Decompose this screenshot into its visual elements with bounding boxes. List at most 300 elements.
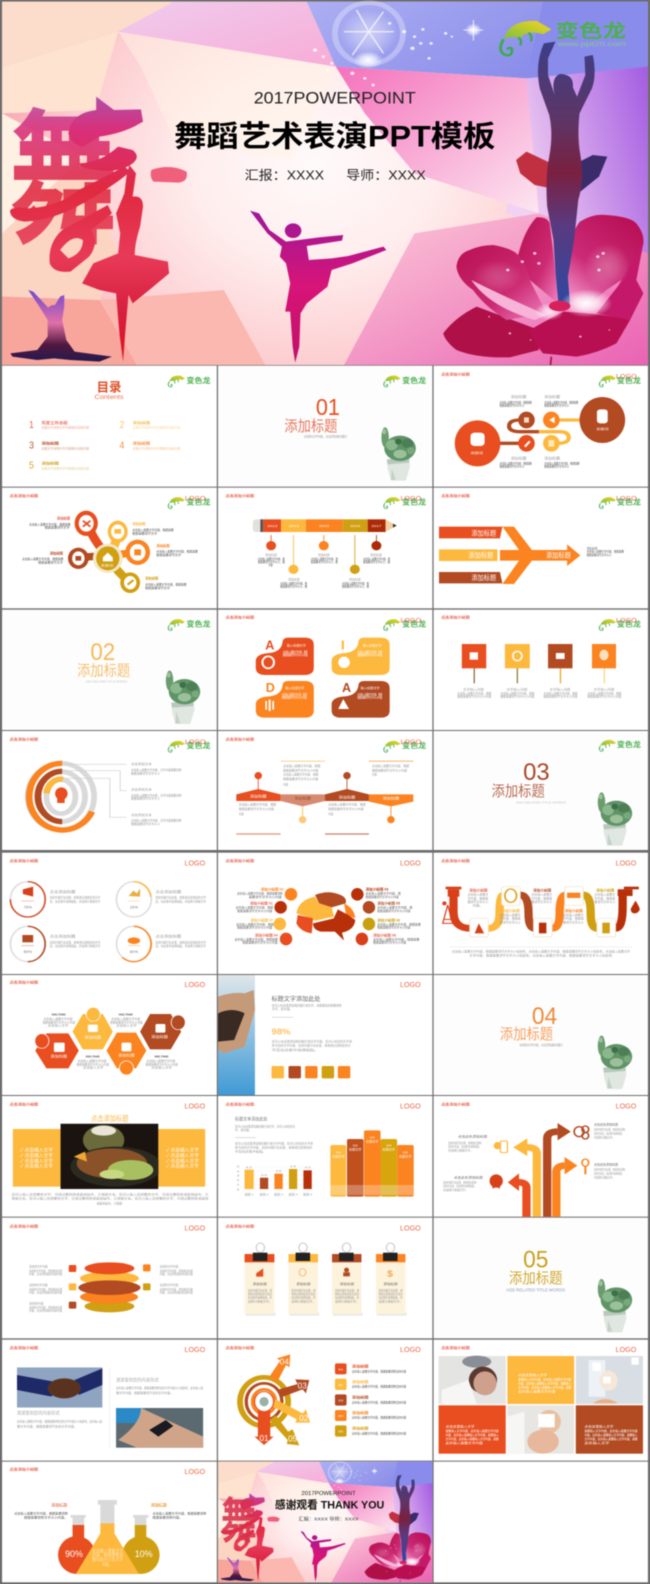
- slide label: 点击添加小标题: [441, 614, 471, 620]
- card red: 点击输入需要文字内容，根据: [283, 649, 308, 654]
- text column: 字，和内容。: [235, 1127, 252, 1132]
- disc text blocks: [29, 1264, 193, 1313]
- contents list: 此图文字说明文字内容相关总结内容: [41, 425, 90, 430]
- arrow text blocks: 并选择只保留文字。: [594, 1135, 615, 1140]
- hexagon cluster: [35, 1014, 181, 1068]
- section caption: ADD RELATED TITLE WORDS: [86, 680, 128, 683]
- small bar chart: 2: [237, 1178, 239, 1182]
- brand logo: www.ppt20.com: [556, 40, 626, 48]
- pipeline text: 添加小标题: [469, 887, 488, 893]
- caption text: 您可以输入您想要的文字，可通过要转换或其他操作，只保留文本。您可以输入您想要的文字，可通过要转换或其他操作，只: [12, 1192, 209, 1196]
- contents heading: 目录: [97, 380, 121, 395]
- pipe caps and drop: [442, 887, 640, 923]
- arrow text blocks: 您的内容打在这里，或者通过复制: [594, 1127, 626, 1132]
- section caption: ADD RELATED TITLE WORDS: [506, 1288, 565, 1293]
- brown card: 点击这里输入文字: [585, 1424, 614, 1428]
- flask labels: 添加标题: [51, 1502, 68, 1508]
- row group 6 and 7: [2, 853, 648, 1095]
- brain text blocks: 此处输入需要文字内容，根据: [236, 905, 274, 910]
- radial arrow 03: 03: [298, 1382, 307, 1390]
- logo text: LOGO: [400, 859, 421, 867]
- tall rounded bars: 01: [336, 1151, 341, 1154]
- section caption: 请替换文字内容，点击添加相关图片: [304, 434, 348, 438]
- logo: [384, 376, 427, 387]
- pipeline text: 字内容，根据需: [500, 916, 521, 921]
- slide label: 点击添加小标题: [10, 1101, 39, 1107]
- main arrow: [500, 527, 580, 584]
- squares and stems: [462, 644, 616, 683]
- hexagon text blocks: 根据需要调节文字大小内容: [77, 1062, 110, 1066]
- pipeline text: 添加小标题: [533, 887, 552, 893]
- ring text blocks: [131, 761, 182, 826]
- timeline text: 点击输入需要文字内容，根: [258, 556, 285, 561]
- keyword text blocks: 根据需要调节文字大小: [544, 464, 570, 469]
- logo text: LOGO: [184, 859, 206, 867]
- brain text blocks: 添加小标题 02: [261, 886, 284, 892]
- tall rounded bars: [330, 1130, 414, 1197]
- right bullets: ✓ 点击输入文字: [166, 1163, 199, 1169]
- section caption: 请替换文字内容，点击添加相关图片: [519, 1042, 563, 1047]
- logo: [384, 616, 427, 631]
- logo: [168, 376, 211, 387]
- flask values: [65, 1548, 153, 1568]
- brain text blocks: 根据需要调节文字大小内容: [237, 925, 273, 930]
- slide label: 点击添加小标题: [441, 371, 471, 376]
- right bullets: [166, 1147, 199, 1169]
- gauge text blocks: 后，在此框中选择粘贴，并选择只保留文字: [50, 943, 101, 948]
- logo: [599, 740, 642, 751]
- gauge text blocks: 您的内容打在这里，或者通过复制您的文字: [50, 895, 101, 900]
- text block right: 渡渡复制您的内容形式: [116, 1377, 159, 1383]
- card red: [256, 638, 314, 675]
- disc text blocks: 内容，点击添加相关标题内容: [29, 1308, 63, 1313]
- sparkle ring: [313, 3, 483, 86]
- node text blocks: 点击输入需要文字内容，根据需要: [156, 549, 198, 554]
- small bar chart: 类别 3: [274, 1192, 283, 1197]
- ribbon text blocks: 内容: [328, 811, 334, 816]
- logo: 变色龙: [402, 741, 427, 750]
- number 04: 04: [532, 1002, 557, 1029]
- list items: 添加标题: [352, 1410, 369, 1415]
- small bar chart: 4.2: [305, 1166, 311, 1170]
- body text: 字后在此框中选择粘贴。: [272, 1047, 318, 1052]
- square captions: 根据需要调节文字大小内容: [457, 694, 492, 698]
- row group 8 and 9: [2, 1096, 648, 1338]
- brain text blocks: 添加小标题 05: [377, 900, 401, 906]
- radial arrow 05: 05: [288, 1435, 297, 1443]
- flower: [443, 215, 644, 365]
- ribbon text blocks: 点击输入需要文字内容，根据: [283, 763, 321, 768]
- hero background: [2, 2, 648, 365]
- left bars: 添加标题: [468, 550, 494, 559]
- pipeline text: 要调节文字大小: [468, 899, 489, 904]
- square captions: 根据需要调节文字大小内容: [500, 694, 535, 698]
- disc text blocks: 请替换文字内容: [29, 1282, 48, 1287]
- arrow text blocks: 点击此处添加标题: [454, 1175, 484, 1179]
- radial arrow 04: 04: [280, 1357, 289, 1366]
- flask labels: [14, 1502, 207, 1520]
- disc text blocks: 内容，点击添加相关标题内容: [160, 1290, 193, 1294]
- timeline nodes: [266, 541, 381, 574]
- ring text blocks: 点击输入需要文字内容，文字内容需要调整: [131, 793, 182, 797]
- card brown: 输入标题文字: [361, 685, 380, 690]
- ring text blocks: 点击输入需要文字内容，文字内容需要调整: [131, 818, 182, 823]
- slide: photo with 98 percent: [218, 975, 432, 1095]
- row group 10 and 11: [2, 1340, 648, 1582]
- card brown: A: [342, 681, 351, 696]
- section title: 添加标题: [284, 418, 337, 435]
- numbered markers: [255, 772, 395, 823]
- center icon: [255, 1392, 274, 1412]
- brain text blocks: 此处输入需要文字内容，根据需要调整: [237, 891, 283, 896]
- brain text blocks: 根据需要调节文字大小内容: [243, 940, 278, 945]
- tall rounded bars: 标题文字: [383, 1147, 396, 1152]
- slide: radial arrows: [218, 1340, 432, 1461]
- slide label: 点击添加小标题: [10, 1223, 39, 1228]
- keyword text blocks: 点击输入需要文字内容，根据需要: [544, 461, 580, 465]
- text block right: 要文字内容，根据需要调节您的文字内容。: [116, 1390, 173, 1395]
- card brown: [332, 681, 390, 718]
- photo: food plate: [61, 1124, 162, 1189]
- photo: baby checkup: [507, 1405, 574, 1454]
- slide: percent circles: [2, 853, 217, 974]
- calligraphy brush accents: [10, 97, 187, 272]
- slide: hexagons: [2, 975, 217, 1095]
- square captions: 点击输入需要文字内容，根据: [587, 691, 622, 695]
- arrow text blocks: 您的文本后，在此框中选择粘贴，: [594, 1131, 624, 1136]
- slide label: 点击添加小标题: [226, 1345, 255, 1350]
- text block left: 要文字内容，根据需要调节您的文字内容。: [17, 1424, 77, 1428]
- pencil bar: 2013: [267, 524, 277, 528]
- node text blocks: 点击输入需要文字内容，根据需要: [145, 582, 187, 587]
- icon boxes: [470, 887, 616, 937]
- hexagon text blocks: 根据需要调节文字大小内容: [110, 1020, 143, 1024]
- left bullets: [20, 1147, 53, 1169]
- disc text blocks: 请替换文字内容: [29, 1264, 48, 1269]
- pipeline text: 点击输入需要文: [531, 892, 553, 897]
- note four: 选择只保留文字。: [378, 1299, 403, 1303]
- logo: LOGO: [616, 372, 637, 380]
- node text blocks: 根据需要调节文字: [145, 585, 171, 590]
- timeline text: 点击输入需要文字内容，根: [363, 556, 390, 561]
- logo: [384, 738, 427, 752]
- logo: 变色龙: [617, 619, 642, 628]
- hexagon text blocks: 点击输入文字: [48, 1023, 69, 1028]
- small bar chart: 0: [237, 1188, 239, 1191]
- side icon circles: [274, 888, 375, 945]
- tall rounded bars: 标题文字: [332, 1154, 345, 1158]
- closing artwork: [218, 1462, 432, 1582]
- disc text blocks: 内容，点击添加相关标题内容: [29, 1290, 63, 1294]
- arrow text blocks: [443, 1122, 626, 1192]
- brain text blocks: 根据需要调节文字大小内容: [377, 925, 411, 930]
- circle nodes: 关键词: [101, 563, 114, 568]
- closing title: 感谢观看 THANK YOU: [275, 1498, 384, 1511]
- slide: pipeline: [434, 853, 648, 974]
- accent rules: [236, 761, 413, 835]
- flask right: [122, 1515, 160, 1574]
- node text blocks: 添加标题: [132, 521, 146, 526]
- brain text blocks: 添加小标题 06: [377, 917, 401, 922]
- connector arms: [79, 523, 138, 582]
- hexagon text blocks: 468,769K: [154, 1055, 169, 1059]
- card yellow: [332, 638, 390, 675]
- card brown: 点击输入需要文字内容，根据: [357, 692, 383, 697]
- pipeline text: 点击输入需要文: [563, 912, 584, 917]
- left bullets: ✓ 点击输入文字: [20, 1163, 53, 1169]
- row group 2 and 3: [2, 366, 648, 608]
- gauge text blocks: 后，在此框中选择粘贴，并选择只保留文字: [155, 899, 207, 903]
- ring text blocks: 点击输入需要文字内容，文字内容需要调整: [131, 767, 182, 772]
- gauge text blocks: 点击添加标题: [155, 933, 181, 939]
- circle nodes: [68, 511, 150, 593]
- contents list: 1: [29, 420, 34, 431]
- brain text blocks: 根据需要调节文字大小内容: [373, 940, 407, 945]
- contents list: 添加标题: [133, 420, 151, 425]
- flower glow: [473, 243, 630, 341]
- flask values: 10%: [135, 1550, 153, 1560]
- brown card: 此处输入文字: [585, 1440, 610, 1445]
- node text blocks: 根据需要调节文字: [132, 531, 158, 535]
- disc text blocks: 请替换文字内容，添加相关标题: [160, 1268, 193, 1273]
- ribbon: [236, 789, 413, 806]
- ribbon text blocks: 根据需要调节文字大小内容: [328, 806, 364, 811]
- logo: [599, 372, 642, 387]
- node text blocks: [22, 515, 198, 590]
- brain text blocks: 此处输入需要文字内容，根据需要: [373, 937, 420, 941]
- text block left: 渡渡复制您的内容形式: [17, 1410, 60, 1416]
- slide: ribbon timeline: [218, 731, 432, 850]
- pencil bar: 2017: [371, 524, 382, 528]
- logo: LOGO: [185, 738, 206, 746]
- slide: bar charts: [218, 1096, 432, 1217]
- logo: LOGO: [616, 616, 637, 624]
- square captions: [457, 687, 622, 698]
- text block left: [17, 1410, 102, 1428]
- brain text blocks: 添加小标题 01: [250, 900, 273, 906]
- logo: 变色龙: [617, 498, 642, 506]
- slide label: 点击添加小标题: [226, 858, 255, 863]
- logo text: LOGO: [184, 981, 206, 989]
- node text blocks: 添加标题: [145, 575, 159, 581]
- small bar chart: [237, 1165, 313, 1197]
- slide: section 04: [434, 975, 648, 1095]
- text column: 您可以在这里添加相关图片或文字内容，您可以将您的文字替: [235, 1141, 314, 1146]
- card yellow: 点击输入需要文字内容，根据: [357, 649, 383, 654]
- logo text: LOGO: [616, 1346, 637, 1354]
- hexagon text blocks: 点击输入文字: [116, 1023, 137, 1028]
- keyword text blocks: 添加标题: [511, 394, 526, 399]
- hexagon text blocks: 468,769K: [85, 1055, 100, 1059]
- ribbon text blocks: 点击输入需要文字内容，根据: [239, 802, 277, 807]
- photo: hand and sky: [218, 975, 255, 1095]
- slide label: 点击添加小标题: [226, 1101, 255, 1107]
- disc text blocks: 请替换文字内容，添加相关标题: [29, 1287, 63, 1291]
- brain text blocks: 此处输入需要文字内容，根: [366, 891, 401, 896]
- brand logo: 变色龙: [555, 21, 626, 42]
- intro text: 文字，和内容。: [272, 1006, 293, 1011]
- left bars: 添加标题: [471, 573, 497, 582]
- slide label: 点击添加小标题: [441, 1101, 471, 1107]
- flask values: 内容，根据需要调: [92, 1552, 123, 1558]
- heading: 点击添加标题: [91, 1114, 129, 1123]
- slide: photo grid: [434, 1340, 648, 1461]
- text column: 换为您的文字内容，您的内容打在这里，或者通过复制您的: [235, 1145, 313, 1150]
- logo: [168, 619, 211, 631]
- right ballerina: [516, 42, 607, 303]
- photo: smart watch: [116, 1408, 203, 1448]
- ribbon text blocks: 根据需要调节文字大小内容: [283, 768, 319, 772]
- slide label: 点击添加小标题: [226, 493, 255, 498]
- intro text: [272, 1003, 342, 1011]
- square captions: 文字输入问题: [507, 687, 528, 691]
- pipeline text: 字内容，根据需: [531, 896, 553, 900]
- yellow card: 内容，此处输入需要输入文字内容，需要输入: [518, 1381, 572, 1386]
- brain text blocks: 根据需要调节文字大小内容: [366, 894, 399, 899]
- pipeline text: 点击输入需要文: [500, 912, 521, 917]
- radial arrow 02: 02: [299, 1414, 308, 1423]
- body text: [272, 1039, 352, 1052]
- brain illustration: [296, 892, 355, 941]
- arrow text blocks: 您的内容打在这里，或者通过复制: [443, 1180, 477, 1184]
- icon: head: [55, 787, 68, 803]
- brain text blocks: 此处输入需要文字内容，根: [377, 905, 413, 910]
- disc text blocks: 请替换文字内容，添加相关标题: [29, 1305, 63, 1310]
- flask values: 整内容大小及文字: [92, 1557, 123, 1563]
- note four: 者通过复制您的文本后: [378, 1291, 403, 1296]
- tall rounded bars: 标题文字: [349, 1147, 362, 1152]
- contents list: 添加标题: [41, 460, 60, 466]
- icon: potted plant: [598, 792, 632, 846]
- slide: thank you: [218, 1462, 432, 1582]
- ring text blocks: 点击添加文本: [131, 761, 152, 766]
- small bar chart: 2.5: [261, 1173, 267, 1177]
- logo: LOGO: [400, 738, 421, 746]
- slide: clipped notes: [218, 1218, 432, 1338]
- logo: [168, 738, 211, 752]
- contents list: 此图文字说明文字内容相关总结内容: [41, 466, 90, 470]
- timeline text: 据需要调节文字大小，根: [342, 584, 369, 588]
- disc text blocks: 请替换内容: [29, 1301, 44, 1305]
- note four: 添加标题: [383, 1281, 398, 1286]
- heading: 标题文字添加此处: [272, 995, 321, 1003]
- ribbon: 添加标题: [250, 793, 267, 798]
- list items: 此处输入需要文字内容，根据需要调整您的内容: [352, 1415, 407, 1420]
- slide: four notch cards: [218, 610, 432, 730]
- slide label: 点击添加小标题: [226, 1223, 255, 1228]
- slide: converging arrows: [434, 488, 648, 608]
- square captions: 文字输入问题: [463, 687, 484, 691]
- pipeline text: 字内容，根据需: [563, 916, 584, 921]
- flask center: [76, 1500, 139, 1574]
- divider: [272, 1016, 293, 1018]
- list items: 此处输入需要文字内容，根据需要调整您的内容: [352, 1369, 407, 1373]
- timeline text: 添加标题: [318, 552, 330, 557]
- ribbon text blocks: 根据需要调节文字大小内容: [239, 806, 275, 811]
- number 02: 02: [90, 638, 115, 665]
- ring text blocks: 根据需要调节文字大小: [131, 821, 161, 826]
- timeline text: 内容: [269, 562, 273, 567]
- slide: section 03: [434, 731, 648, 850]
- ribbon: 添加标题: [383, 795, 399, 801]
- box icons: [475, 889, 610, 933]
- hexagon text blocks: 468,769K: [119, 1013, 134, 1017]
- pipeline text: [450, 887, 632, 957]
- gauge text blocks: 后，在此框中选择粘贴，并选择只保留文字: [155, 943, 207, 948]
- contents list: 此图文字说明文字内容相关总结内容: [133, 425, 181, 430]
- pipeline text: 字内容，根据需: [594, 896, 616, 900]
- pipeline text: 添加小标题: [502, 908, 521, 913]
- yellow card: 此处输入需要文字内容: [518, 1389, 556, 1394]
- icon: potted plant: [381, 427, 416, 481]
- flask labels: 添加标题: [151, 1502, 167, 1508]
- small bar chart: 类别 2: [260, 1192, 269, 1197]
- small bar chart: 1: [237, 1183, 239, 1187]
- arrow text blocks: 您的内容打在这里，或者通过复制: [448, 1140, 482, 1145]
- note three: 添加标题: [340, 1281, 355, 1286]
- timeline text: 添加标题: [349, 577, 361, 581]
- keyword circles: 关键词: [471, 450, 484, 455]
- node text blocks: 添加标题: [57, 515, 71, 521]
- node text blocks: 根据需要调节文字: [156, 552, 182, 557]
- card orange: 根据需要调节文字大小内容: [282, 695, 307, 700]
- note one: 添加标题: [253, 1281, 268, 1286]
- text column: [235, 1116, 314, 1154]
- timeline text: 点击输入需要文字内容，根: [280, 581, 308, 585]
- note one: 在此框中选择粘贴，并: [248, 1295, 272, 1300]
- arrow text block: 点击输入需要文字内容，根据需要: [587, 549, 624, 554]
- dancer in calligraphy: [82, 165, 169, 362]
- list items: 04: [338, 1414, 343, 1418]
- keyword text blocks: 点击输入需要文字内容，根据需要: [500, 400, 532, 404]
- timeline stems: [271, 535, 376, 565]
- contents list: 此图文字说明文字内容相关总结内容: [133, 446, 181, 450]
- leader lines: [62, 764, 126, 817]
- slide label: 点击添加小标题: [10, 493, 39, 498]
- slide: brain: [218, 853, 432, 974]
- text block right: 此处输入需要文字内容，根据需要调整您的文字内容大小和颜色。此处输入需: [116, 1385, 204, 1390]
- ring text blocks: 根据需要调节文字大小: [131, 771, 161, 775]
- caption text: 或其他操作，只保留: [97, 1201, 123, 1205]
- photo: clinic: [576, 1356, 643, 1404]
- pipeline text: 字内容，根据需: [468, 896, 489, 900]
- slide: metaball diagram: [2, 488, 217, 608]
- keyword text blocks: 根据需要调节文字大小: [500, 464, 525, 469]
- slide: section 02: [2, 610, 217, 730]
- keyword text blocks: 点击输入需要文字内容，根据需要: [544, 400, 579, 404]
- hero artwork: [2, 2, 648, 365]
- list items: 添加标题: [352, 1394, 369, 1400]
- logo: LOGO: [616, 494, 637, 502]
- icon buttons: [272, 1066, 350, 1078]
- radial arrow 05: [269, 1415, 299, 1445]
- timeline text: 据需要调节文字大小，根: [280, 584, 308, 588]
- presenter line: [245, 168, 426, 183]
- kneeling dancer: [10, 290, 112, 362]
- logo text: LOGO: [400, 1102, 421, 1110]
- slide: contents: [2, 366, 217, 487]
- slide: linked keywords: [434, 366, 648, 487]
- arrow: brown: [547, 1123, 571, 1217]
- brain text blocks: 添加小标题 07: [250, 917, 274, 922]
- node text blocks: 添加标题: [50, 550, 64, 556]
- arrow text blocks: 点击此处添加标题: [594, 1162, 619, 1167]
- logo: [384, 494, 427, 509]
- contents list: 2: [119, 420, 124, 431]
- flask labels: 点击输入需要文字内容，根据需要调整: [14, 1511, 69, 1516]
- gauge icons and values: [22, 887, 140, 954]
- brain text blocks: 此处输入需要文字内容，根据: [236, 922, 274, 926]
